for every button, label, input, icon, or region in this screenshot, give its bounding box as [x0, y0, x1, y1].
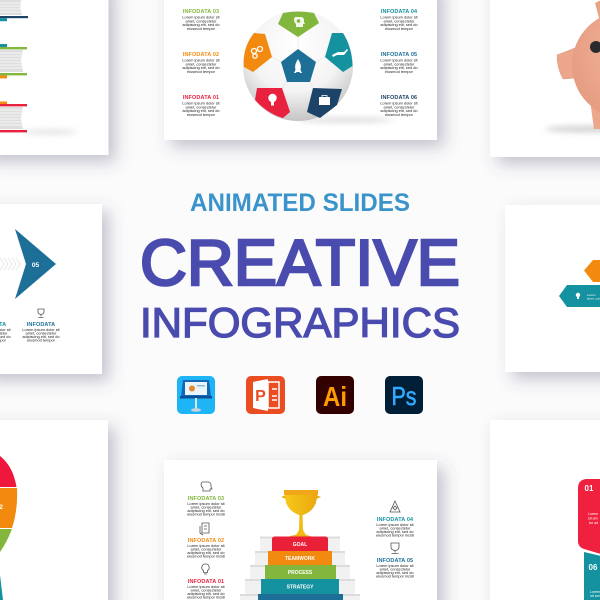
arrow 05: 05 — [32, 262, 39, 269]
segment: orange with gears icon — [244, 33, 272, 72]
text block: infodata 05: Lorem ipsum dolor sit — [376, 563, 415, 568]
piggy bank — [557, 0, 600, 129]
text block: infodata 04: adipiscing elit, sed do — [376, 529, 414, 534]
hexagon teal: amet, con — [587, 296, 600, 300]
sphere seams — [272, 37, 325, 88]
panel: top-left book stack slide — [0, 0, 108, 155]
text block: infodata 03: amet, consectetur — [191, 504, 222, 510]
text block: infodata 06: INFODATA 06 — [381, 95, 417, 101]
panel: top-center sphere slide — [164, 0, 437, 140]
block 06 teal: Lorem — [590, 590, 600, 594]
text block: infodata 05: eiusmod tempor incidi — [376, 574, 414, 578]
text block: infodata 06: amet, consectetur — [384, 104, 415, 109]
text block: infodata 05 — [376, 558, 415, 578]
segment: red with bulb icon — [255, 88, 290, 118]
text block: infodata 06 — [380, 95, 419, 117]
icon: powerpoint: P — [255, 388, 266, 405]
text block: infodata 03: INFODATA 03 — [183, 9, 219, 15]
text block: infodata 04: INFODATA 04 — [377, 517, 414, 523]
title: infographics: INFOGRAPHICS — [140, 299, 460, 346]
text block: infodata 04: amet, consectetur — [380, 526, 411, 530]
text block: infodata 05: INFODATA 05 — [377, 558, 413, 564]
subtitle: ANIMATED SLIDES — [190, 189, 410, 217]
text block: infodata 03: Lorem ipsum dolor sit — [182, 14, 221, 20]
text block: infodata 02 — [182, 52, 221, 74]
trophy — [281, 490, 321, 537]
text block: infodata: Lorem ipsum dolor sit — [22, 327, 61, 332]
hexagon teal: Lorem — [587, 293, 596, 297]
text block: infodata 02: amet, consectetur — [191, 546, 222, 552]
text block: infodata 04: INFODATA 04 — [381, 9, 418, 15]
text block: infodata: amet, consectetur — [26, 330, 57, 336]
icon: keynote — [177, 376, 215, 414]
text block: infodata 01: INFODATA 01 — [188, 579, 224, 585]
text block: infodata 03: amet, consectetur — [186, 18, 217, 23]
pig shadow — [545, 126, 600, 132]
text block: infodata 02: INFODATA 02 — [183, 52, 219, 58]
text block: infodata 05: eiusmod tempor — [385, 69, 414, 74]
text block: infodata 01: eiusmod tempor — [187, 112, 216, 117]
text block: infodata 03: Lorem ipsum dolor sit — [187, 501, 226, 506]
step: strategy — [261, 579, 339, 594]
block 01 red: sit am — [588, 516, 598, 520]
stairs background — [240, 536, 360, 600]
text block: infodata 05: adipiscing elit, sed do — [380, 65, 418, 70]
panel: bottom-right shape slide — [490, 420, 600, 600]
chevrons — [0, 258, 20, 270]
book stack — [0, 0, 28, 132]
text block: infodata — [22, 322, 61, 342]
segment: teal with hand icon — [325, 33, 352, 72]
block 06 teal: sit am — [590, 594, 600, 598]
text block: infodata 05: INFODATA 05 — [381, 52, 417, 58]
icon: photoshop: Ps — [392, 381, 416, 411]
panel: bottom-center stairs slide — [164, 460, 437, 600]
sphere shadow — [297, 118, 393, 122]
text block: infodata 02: adipiscing elit, sed do — [187, 550, 225, 555]
text block: infodata 04: Lorem ipsum dolor sit — [380, 14, 419, 20]
text block: infodata 01: eiusmod tempor incidi — [187, 594, 225, 600]
text block: infodata 06: adipiscing elit, sed do — [380, 108, 418, 113]
text block: infodata 03: eiusmod tempor incidi — [187, 512, 225, 516]
hexagon teal — [559, 285, 600, 307]
text block: infodata 02: amet, consectetur — [186, 61, 217, 66]
text block: infodata 01 — [182, 95, 221, 117]
text block: infodata 03: adipiscing elit, sed do — [187, 508, 225, 513]
icon: photoshop — [385, 376, 423, 414]
segment: center blue with rocket icon — [281, 49, 316, 82]
text block: infodata 04 — [376, 517, 415, 538]
text block: infodata 04: Lorem ipsum dolor sit — [376, 522, 415, 527]
text block: infodata 01: Lorem ipsum dolor sit — [187, 584, 226, 589]
text block: infodata 04: eiusmod tempor incidi — [376, 532, 414, 538]
icon: trophy — [38, 309, 44, 318]
panel: middle-right hexagon slide — [505, 205, 600, 372]
icon: head — [201, 482, 212, 491]
panel: middle-left arrow slide — [0, 204, 102, 374]
step: goal: GOAL — [293, 542, 307, 548]
text block: infodata 06: eiusmod tempor — [385, 112, 414, 117]
text block: infodata 02: Lorem ipsum dolor sit — [182, 58, 221, 62]
book shadow — [23, 129, 77, 135]
segment: green top with head icon — [278, 12, 319, 37]
text block: infodata: eiusmod tempor — [27, 338, 56, 342]
text block: infodata 03: eiusmod tempor — [187, 26, 216, 31]
block 06 teal — [584, 552, 600, 600]
text block: infodata 02: INFODATA 02 — [188, 538, 224, 544]
step: base — [258, 594, 343, 600]
step: goal — [272, 536, 328, 551]
text block: infodata 03 — [187, 496, 226, 516]
text block: infodata 04: eiusmod tempor — [385, 26, 414, 31]
icon: illustrator — [316, 376, 354, 414]
text block: infodata 02: Lorem ipsum dolor sit — [187, 543, 226, 548]
text block: infodata 03: adipiscing elit, sed do — [182, 22, 220, 27]
text block: infodata 03 — [182, 9, 221, 31]
icon: pyramid — [390, 501, 400, 512]
text block: infodata 04 — [380, 9, 419, 31]
text block: infodata: adipiscing elit, sed do — [22, 334, 60, 339]
panel: top-right piggy bank slide — [490, 0, 600, 157]
panel: bottom-left balloon slide — [0, 420, 108, 600]
text block: infodata 04: amet, consectetur — [384, 18, 415, 23]
text block: infodata 05: amet, consectetur — [380, 566, 411, 572]
text block: infodata: INFODATA — [27, 322, 55, 328]
block 06 teal: 06 — [589, 563, 598, 572]
sphere — [243, 11, 353, 121]
block 01 red — [578, 479, 600, 554]
text block: infodata 05: amet, consectetur — [384, 61, 415, 66]
text block: cropped infodata — [0, 322, 12, 342]
icon: trophy outline — [391, 543, 399, 554]
block 01 red: 01 — [585, 484, 594, 493]
text block: infodata 02: eiusmod tempor incidi — [187, 554, 225, 558]
text block: infodata 01: amet, consectetur — [186, 104, 217, 109]
text block: infodata 02: eiusmod tempor — [187, 69, 216, 74]
text block: infodata 06: Lorem ipsum dolor sit — [380, 100, 419, 106]
text block: infodata 01: amet, consectetur — [191, 588, 222, 592]
step: process: PROCESS — [288, 570, 313, 576]
text block: infodata 01 — [187, 579, 226, 600]
text block: infodata 01: INFODATA 01 — [183, 95, 219, 101]
text block: infodata 03: INFODATA 03 — [188, 496, 224, 502]
text block: infodata 05 — [380, 52, 419, 74]
text block: infodata 01: adipiscing elit, sed do — [187, 591, 225, 596]
block 01 red: tur ad — [589, 521, 598, 525]
title: creative: CREATIVE — [140, 226, 460, 299]
icon: bulb — [202, 564, 209, 574]
text block: infodata 05: adipiscing elit, sed do — [376, 570, 414, 575]
icon: illustrator: Ai — [323, 381, 347, 412]
text block: infodata 02 — [187, 538, 226, 558]
step: strategy: STRATEGY — [287, 584, 314, 590]
block 01 red: Lorem — [588, 512, 598, 516]
arrow 05 — [15, 229, 56, 299]
step: teamwork — [268, 551, 332, 565]
text block: infodata 01: Lorem ipsum dolor sit — [182, 100, 221, 106]
balloon segments — [0, 456, 17, 600]
text block: infodata 04: adipiscing elit, sed do — [380, 22, 418, 27]
icon: powerpoint — [246, 376, 285, 414]
step: teamwork: TEAMWORK — [285, 556, 315, 562]
step: process — [265, 565, 336, 579]
text block: infodata 05: Lorem ipsum dolor sit — [380, 58, 419, 62]
text block: infodata 02: adipiscing elit, sed do — [182, 65, 220, 70]
segment: navy with briefcase icon — [307, 88, 342, 118]
text block: infodata 01: adipiscing elit, sed do — [182, 108, 220, 113]
icon: document — [200, 523, 209, 535]
hexagon orange — [584, 260, 600, 282]
